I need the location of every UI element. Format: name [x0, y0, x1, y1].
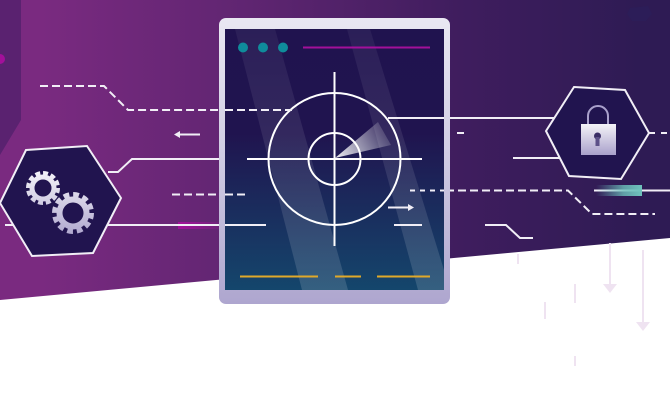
screen device	[219, 18, 450, 304]
magenta glow on circuit line	[178, 222, 228, 229]
gears hexagon	[0, 146, 121, 256]
pale arrows and ticks below the panel	[518, 243, 650, 366]
icon: small gear	[28, 173, 58, 203]
radar sweep	[335, 122, 391, 158]
lock hexagon	[546, 87, 649, 179]
screen bezel	[219, 18, 450, 304]
icon: large gear	[54, 194, 92, 232]
right circuit lines	[388, 118, 670, 238]
dark top right hexagon	[627, 6, 652, 21]
purple background panel	[0, 0, 670, 300]
arrow left	[174, 131, 200, 138]
light beams	[235, 29, 444, 290]
screen display	[225, 29, 444, 290]
window dots	[238, 42, 288, 52]
yellow status bars	[240, 276, 430, 278]
dark left side shape	[0, 0, 21, 155]
magenta title bar	[303, 46, 430, 48]
screen overlay lines	[225, 110, 444, 225]
left circuit lines	[5, 86, 292, 225]
icon: padlock	[581, 106, 616, 155]
radar target	[247, 72, 422, 246]
arrow right	[388, 204, 414, 211]
magenta dot	[0, 54, 5, 64]
teal glow block	[596, 185, 642, 196]
